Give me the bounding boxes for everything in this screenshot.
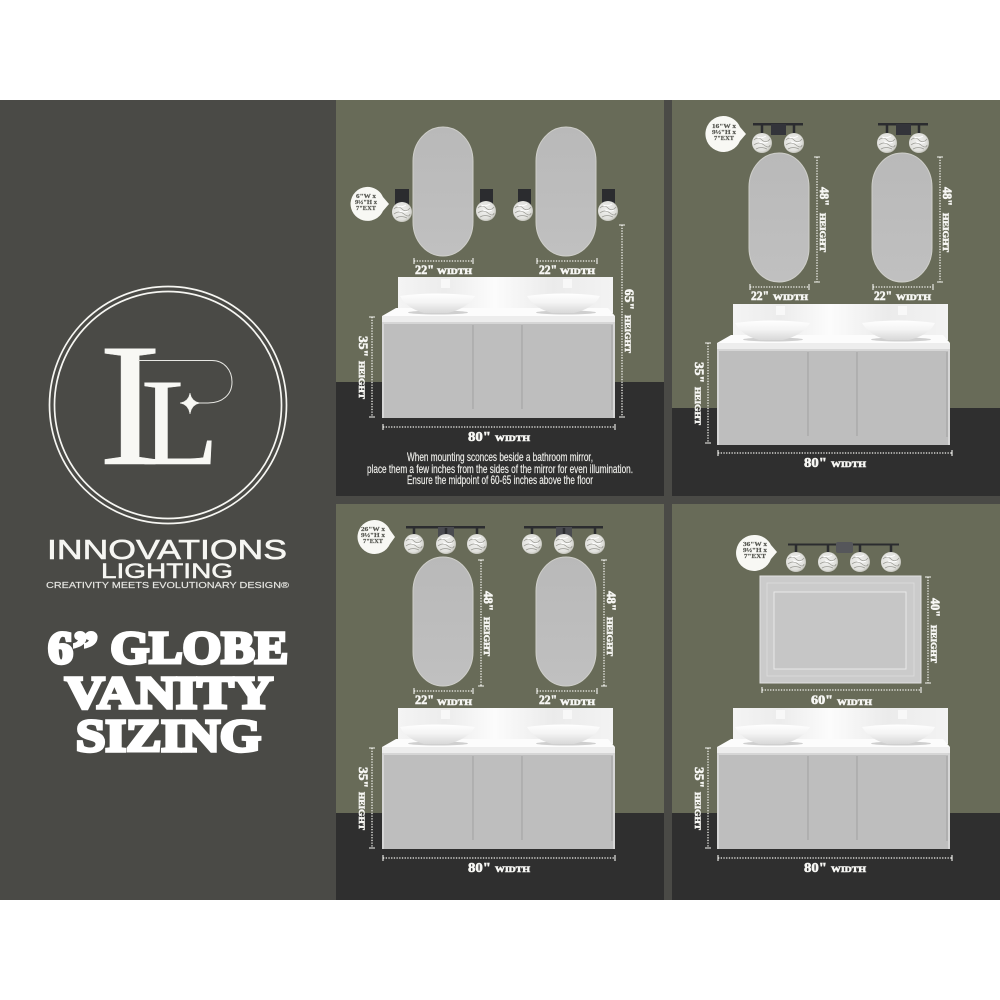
- size bubble: 9½"H x: [355, 199, 378, 206]
- size bubble: 9½"H x: [361, 532, 386, 539]
- dimension: vanity height: HEIGHT: [357, 792, 367, 830]
- mounting note: [367, 450, 633, 487]
- left mirror: [413, 127, 473, 256]
- dimension: mirror heights: [478, 560, 619, 686]
- right mirror: [536, 127, 596, 256]
- mounting note: When mounting sconces beside a bathroom mirror,: [407, 450, 593, 464]
- size bubble: 7"EXT: [356, 205, 377, 212]
- right mirror: [536, 557, 596, 686]
- vanity: [382, 277, 615, 418]
- dimension: mirror height: 40": [928, 598, 943, 617]
- dimension: vanity height: [356, 317, 375, 417]
- dimension: mirror heights: 48": [817, 187, 832, 206]
- dimension: mirror widths: 22": [539, 692, 557, 707]
- dimension: mirror height: HEIGHT: [929, 625, 939, 663]
- panelled rectangular mirror: [760, 576, 921, 683]
- dimension: vanity height: HEIGHT: [693, 792, 703, 830]
- title: SIZING: [76, 710, 261, 761]
- panel: 16 inch two-light vanity: [672, 100, 1000, 496]
- title: 6” GLOBE: [48, 622, 288, 673]
- dimension: mirror height: [925, 577, 943, 683]
- dimension: mirror width: 60": [811, 692, 833, 707]
- size bubble: 9½"H x: [712, 129, 737, 136]
- dimension: mounting height: HEIGHT: [623, 315, 633, 353]
- dimension: mirror heights: HEIGHT: [941, 213, 951, 252]
- title: VANITY: [65, 667, 273, 718]
- dimension: vanity width: [718, 450, 952, 471]
- mounting note: place them a few inches from the sides of the mirror for even illumination.: [367, 462, 633, 476]
- vanity: [717, 708, 950, 849]
- dimension: mirror heights: 48": [604, 591, 619, 611]
- brand sub-name: LIGHTING: [101, 560, 233, 583]
- dimension: vanity width: [718, 855, 952, 876]
- dimension: vanity width: 80": [468, 430, 491, 445]
- dimension: mirror widths: 22": [539, 262, 557, 277]
- panel: 36 inch four-light vanity: [672, 504, 1000, 900]
- dimension: vanity width: 80": [468, 861, 491, 876]
- dimension: mirror widths: 22": [415, 692, 434, 707]
- dimension: vanity height: [692, 748, 711, 848]
- dimension: mirror width: [762, 687, 921, 707]
- dimension: vanity height: 35": [356, 336, 371, 357]
- size bubble: [705, 116, 746, 152]
- dimension: vanity width: 80": [804, 456, 827, 471]
- size bubble: [358, 520, 395, 554]
- left mirror: [413, 557, 473, 686]
- dimension: mirror widths: [414, 688, 597, 707]
- dimension: mirror widths: 22": [751, 288, 769, 303]
- dimension: mirror heights: [814, 157, 955, 282]
- dimension: mounting height: [619, 225, 637, 417]
- size bubble: [351, 187, 389, 221]
- dimension: vanity height: [356, 748, 375, 848]
- size bubble: 6"W x: [356, 193, 377, 200]
- size bubble: 26"W x: [361, 526, 386, 533]
- dimension: mirror heights: HEIGHT: [818, 213, 828, 252]
- dimension: mirror heights: HEIGHT: [605, 617, 615, 656]
- dimension: vanity width: [383, 855, 615, 876]
- dimension: vanity height: 35": [692, 767, 707, 788]
- dimension: mirror heights: 48": [940, 187, 955, 206]
- logo circle: [50, 286, 286, 524]
- vanity: [717, 304, 950, 445]
- dimension: mirror widths: 22": [415, 262, 434, 277]
- left mirror: [749, 153, 809, 282]
- panel: 26 inch three-light vanity: [336, 504, 664, 900]
- dimension: vanity width: WIDTH: [831, 864, 866, 874]
- dimension: vanity width: 80": [804, 861, 827, 876]
- size bubble: 7"EXT: [714, 135, 735, 142]
- dimension: vanity height: [692, 343, 711, 443]
- dimension: mirror widths: WIDTH: [560, 697, 595, 707]
- size bubble: 7"EXT: [363, 538, 384, 545]
- dimension: mirror widths: WIDTH: [896, 292, 931, 302]
- size bubble: 36"W x: [743, 541, 768, 548]
- dimension: vanity width: WIDTH: [495, 433, 530, 443]
- dimension: vanity height: 35": [692, 362, 707, 383]
- dimension: mirror widths: WIDTH: [773, 292, 808, 302]
- size bubble: 16"W x: [712, 123, 737, 130]
- panel: single sconces with oval mirrors: [336, 100, 664, 496]
- dimension: mirror heights: HEIGHT: [482, 617, 492, 656]
- dimension: vanity height: HEIGHT: [357, 361, 367, 399]
- logo monogram: L: [141, 354, 219, 491]
- brand name: INNOVATIONS: [47, 534, 287, 565]
- three-light fixtures: [404, 526, 605, 554]
- sconces: [392, 189, 618, 222]
- dimension: vanity width: WIDTH: [831, 459, 866, 469]
- size bubble: 9½"H x: [743, 547, 768, 554]
- dimension: vanity height: HEIGHT: [693, 387, 703, 425]
- dimension: mirror widths: 22": [874, 288, 892, 303]
- size bubble: [736, 535, 777, 571]
- four-light fixture: [786, 542, 901, 572]
- dimension: vanity width: WIDTH: [495, 864, 530, 874]
- tagline: CREATIVITY MEETS EVOLUTIONARY DESIGN®: [46, 580, 290, 590]
- logo monogram: [98, 308, 232, 503]
- mounting note: Ensure the midpoint of 60-65 inches above the floor: [407, 473, 593, 487]
- dimension: mirror heights: 48": [481, 591, 496, 611]
- logo monogram: I: [98, 308, 162, 503]
- dimension: mirror widths: [750, 284, 933, 303]
- size bubble: 7"EXT: [744, 553, 767, 560]
- dimension: mirror widths: WIDTH: [437, 266, 472, 276]
- dimension: mirror widths: WIDTH: [560, 266, 595, 276]
- right mirror: [872, 153, 932, 282]
- dimension: mirror widths: [414, 258, 597, 277]
- vanity: [382, 708, 615, 849]
- dimension: mounting height: 65": [622, 289, 637, 310]
- title: [48, 622, 288, 761]
- dimension: mirror width: WIDTH: [837, 697, 872, 707]
- two-light fixtures: [752, 123, 929, 153]
- dimension: vanity width: [383, 424, 615, 445]
- dimension: mirror widths: WIDTH: [437, 697, 472, 707]
- panel: brand sidebar: [0, 100, 1000, 900]
- dimension: vanity height: 35": [356, 767, 371, 788]
